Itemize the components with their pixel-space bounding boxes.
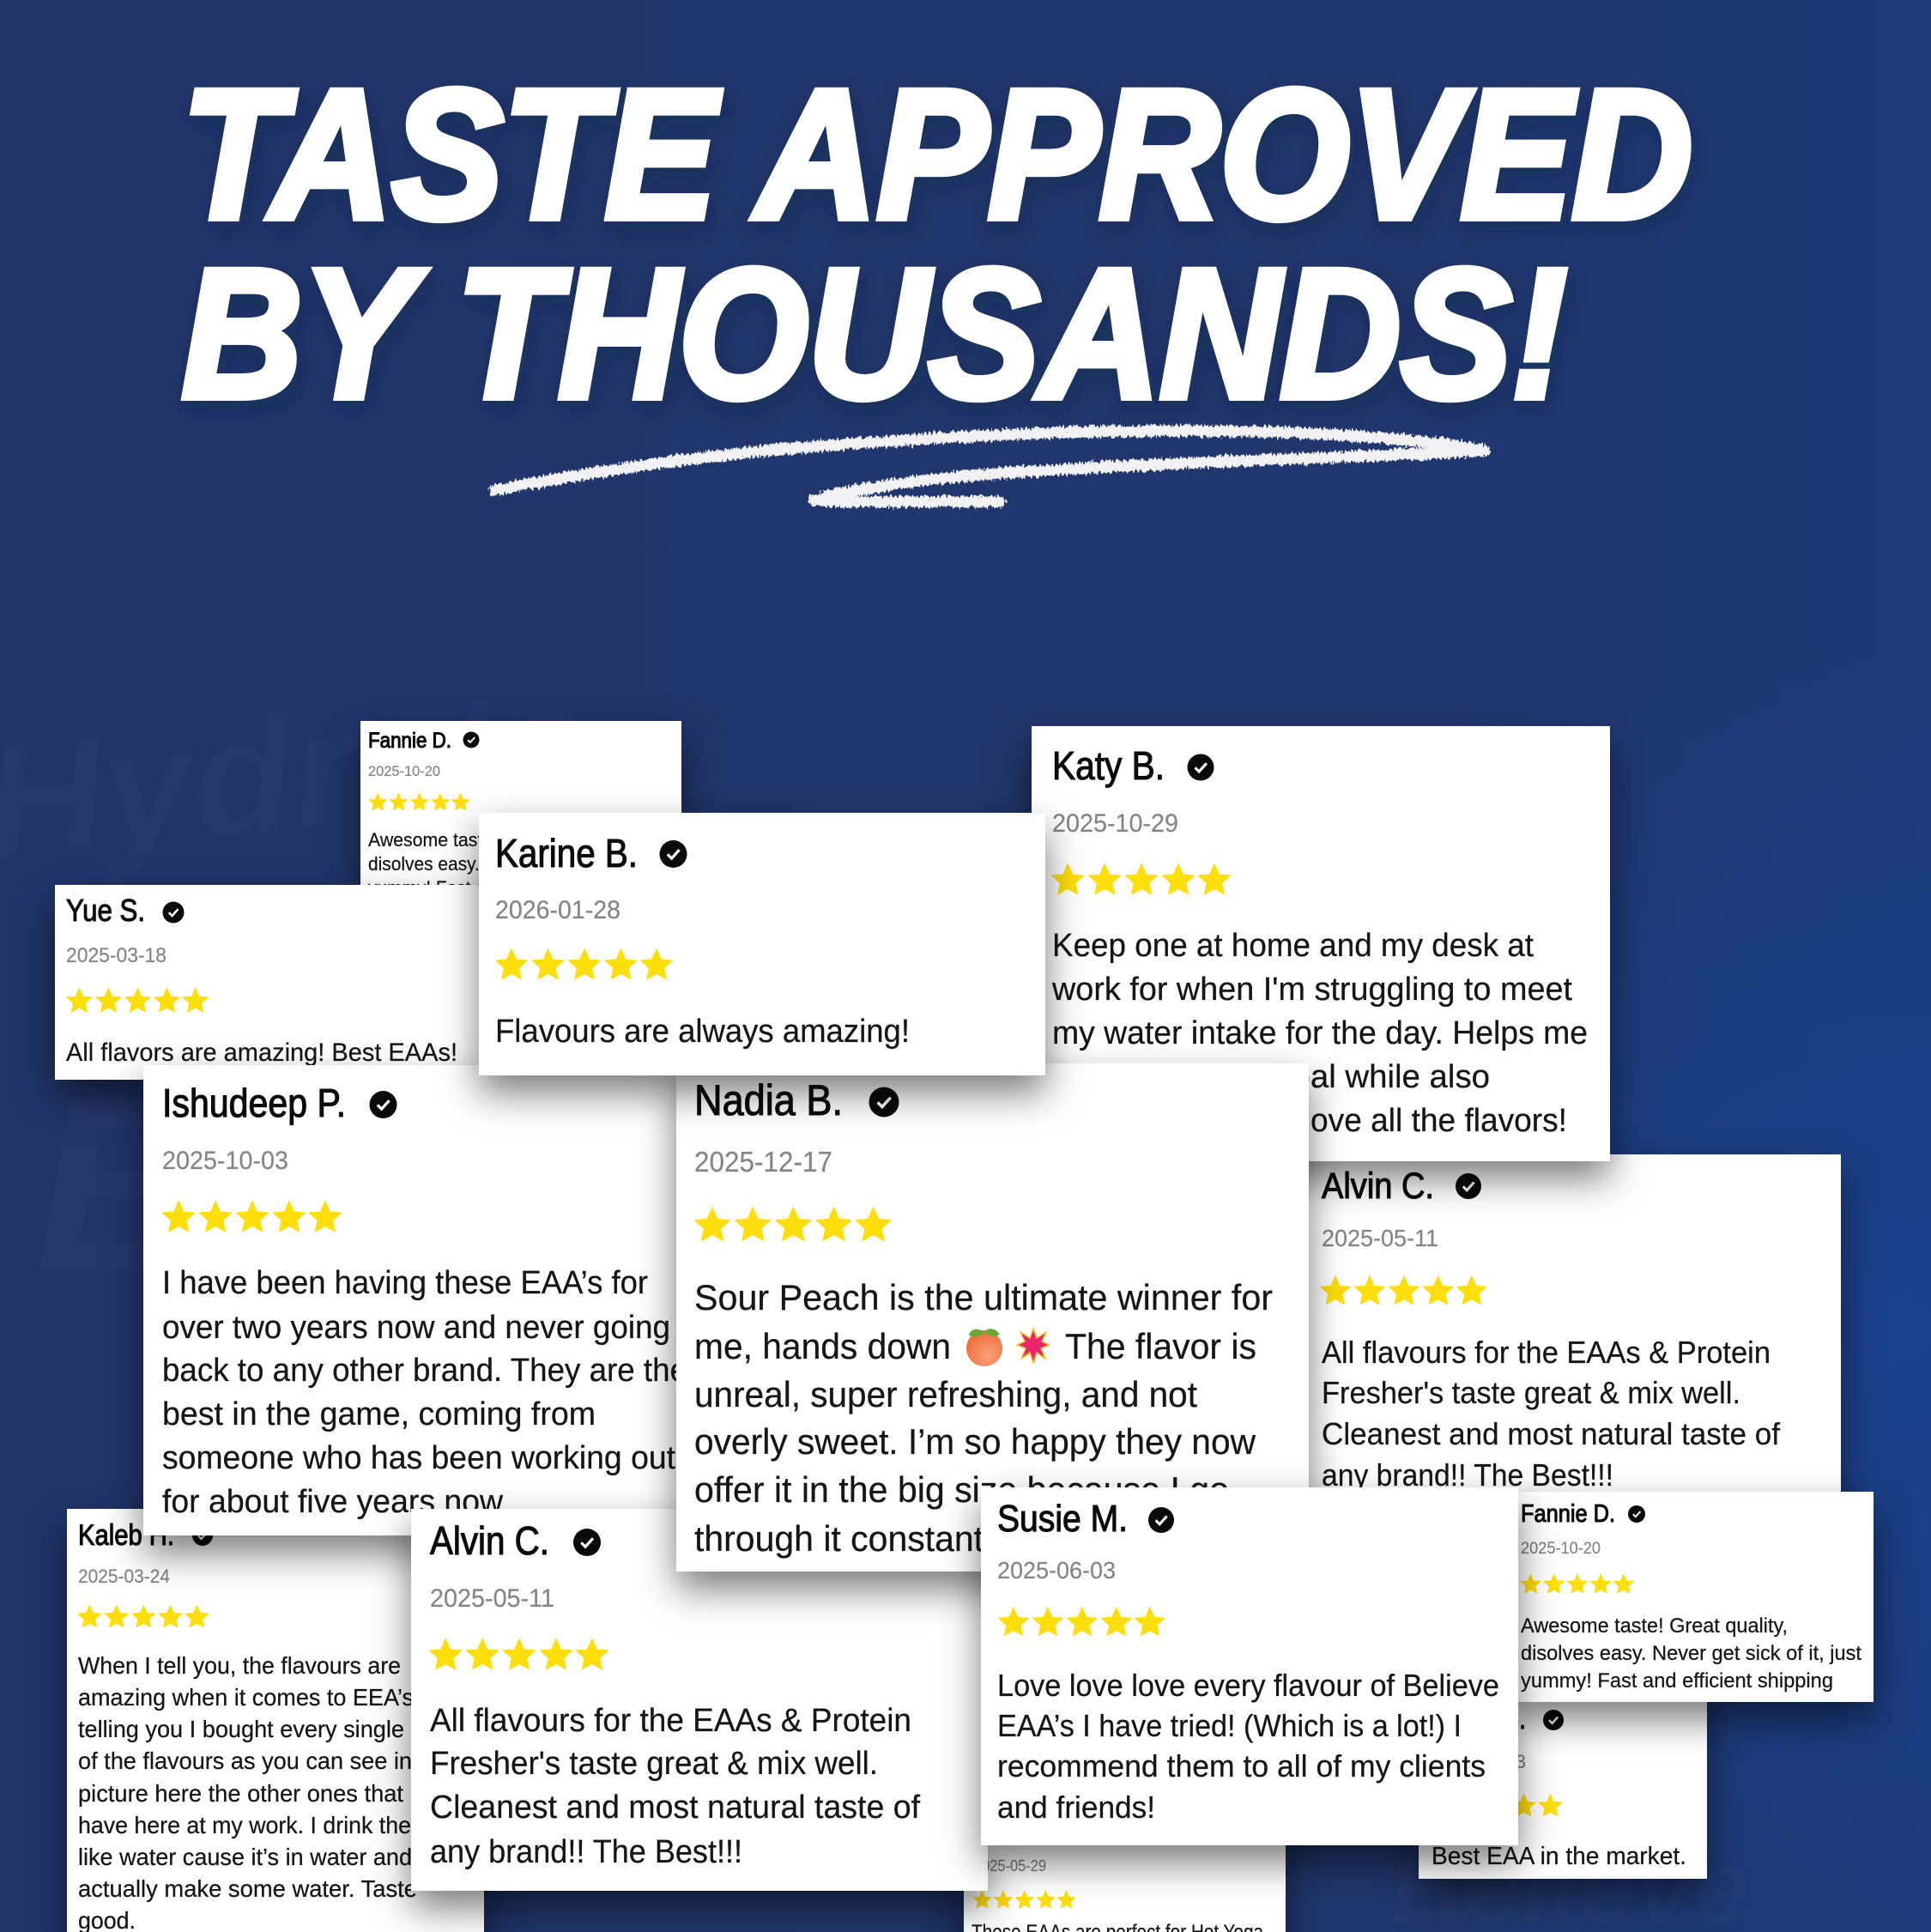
review text: picture here the other ones that bbox=[78, 1780, 403, 1807]
review text: for about five years now bbox=[162, 1484, 504, 1520]
title: TASTE APPROVED bbox=[182, 51, 1692, 257]
five stars bbox=[67, 988, 208, 1012]
five stars bbox=[695, 1208, 891, 1240]
five stars bbox=[973, 1891, 1075, 1908]
review text: Keep one at home and my desk at bbox=[1052, 928, 1534, 964]
review text: All flavours for the EAAs & Protein bbox=[1322, 1335, 1771, 1370]
review date: 2025-08-13 bbox=[1432, 1751, 1526, 1772]
review card: Nadia B. bbox=[676, 1063, 1309, 1572]
review text: Sour Peach is the ultimate winner for bbox=[694, 1277, 1273, 1317]
review date: 2025-03-18 bbox=[66, 944, 166, 967]
title: BY THOUSANDS! bbox=[182, 232, 1567, 436]
review date: 2025-10-03 bbox=[162, 1147, 288, 1175]
review text: amazing when it comes to EEA’s bbox=[78, 1684, 414, 1711]
verified badge bbox=[369, 1091, 396, 1118]
review text: Flavours are always amazing! bbox=[495, 1014, 910, 1050]
review text: overly sweet. I’m so happy they now bbox=[694, 1421, 1256, 1462]
review text: over two years now and never going bbox=[162, 1310, 670, 1346]
review text bbox=[997, 1668, 1499, 1825]
review text: yummy! Fast and efficient shipping bbox=[368, 877, 644, 899]
reviewer name: Alvin C. bbox=[1322, 1166, 1434, 1207]
review date: 2025-12-17 bbox=[694, 1146, 832, 1178]
review text: Fresher's taste great & mix well. bbox=[430, 1746, 878, 1782]
review text: and friends! bbox=[997, 1790, 1155, 1825]
review text bbox=[1521, 1614, 1861, 1693]
five stars bbox=[1432, 1794, 1562, 1816]
review card: Yue S. bbox=[55, 885, 570, 1080]
reviewer name: Susie M. bbox=[997, 1498, 1128, 1540]
review card: bottom partly hidden bbox=[964, 1691, 1286, 1932]
review text: someone who has been working out bbox=[162, 1440, 675, 1476]
review text bbox=[1322, 1335, 1781, 1493]
review date: 2025-05-11 bbox=[1322, 1225, 1438, 1251]
review date: 2025-05-29 bbox=[974, 1857, 1046, 1874]
five stars bbox=[1521, 1574, 1633, 1593]
reviewer name: Ishudeep P. bbox=[162, 1081, 346, 1125]
review text: Cleanest and most natural taste of bbox=[1322, 1416, 1781, 1451]
review card: Alvin C. (right) bbox=[1304, 1154, 1841, 1515]
reviewer name: Fannie D. bbox=[1521, 1500, 1615, 1528]
review text bbox=[1051, 928, 1588, 1139]
review card: Karine B. bbox=[479, 813, 1045, 1075]
review text: any brand!! The Best!!! bbox=[430, 1834, 742, 1870]
verified badge bbox=[659, 840, 687, 868]
verified badge bbox=[1188, 754, 1214, 781]
review text: Cleanest and most natural taste of bbox=[430, 1790, 920, 1826]
verified badge bbox=[1543, 1710, 1564, 1730]
review text: disolves easy. Never get sick of it, just bbox=[1521, 1642, 1861, 1665]
review text: All flavours for the EAAs & Protein bbox=[430, 1703, 911, 1739]
review date: 2025-10-20 bbox=[1521, 1540, 1601, 1558]
reviewer name: Katy B. bbox=[1052, 743, 1165, 788]
five stars bbox=[163, 1202, 341, 1232]
review card: Best EAA bbox=[1419, 1682, 1707, 1879]
review date: 2025-10-29 bbox=[1052, 809, 1178, 838]
five stars bbox=[1321, 1276, 1486, 1304]
review text: I have been having these EAA’s for bbox=[162, 1265, 648, 1301]
verified badge bbox=[573, 1529, 601, 1556]
review text: Awesome taste! Great quality, bbox=[368, 829, 610, 851]
review date: 2025-10-20 bbox=[368, 763, 440, 779]
review text bbox=[430, 1703, 920, 1870]
verified badge bbox=[1628, 1505, 1645, 1523]
review text: have here at my work. I drink the bbox=[78, 1812, 411, 1838]
background: E bbox=[34, 1045, 209, 1323]
review date: 2025-05-11 bbox=[430, 1584, 554, 1613]
review text: my water intake for the day. Helps me bbox=[1052, 1015, 1588, 1051]
review text: All flavors are amazing! Best EAAs! bbox=[66, 1039, 457, 1067]
reviewer name: Karine B. bbox=[495, 831, 638, 875]
icon: explosion emoji bbox=[1017, 1329, 1050, 1363]
review date: 2025-06-03 bbox=[997, 1557, 1116, 1584]
review text: best in the game, coming from bbox=[162, 1396, 596, 1432]
review text: disolves easy. Never get sick of it, just bbox=[368, 853, 670, 875]
review text: offer it in the big size because I go bbox=[694, 1469, 1229, 1510]
reviewer name: Jason S. bbox=[1432, 1703, 1526, 1735]
review date: 2025-03-24 bbox=[78, 1566, 170, 1587]
review text: Best EAA in the market. bbox=[1432, 1843, 1686, 1870]
review card: Katy B. bbox=[1032, 726, 1610, 1161]
review text: When I tell you, the flavours are bbox=[78, 1652, 401, 1679]
reviewer name: Kaleb H. bbox=[78, 1519, 174, 1552]
review text bbox=[694, 1277, 1273, 1559]
review text: Awesome taste! Great quality, bbox=[1521, 1614, 1788, 1638]
reviewer name: Alvin C. bbox=[430, 1518, 549, 1563]
five stars bbox=[430, 1639, 608, 1669]
review text: work for when I'm struggling to meet bbox=[1051, 972, 1572, 1008]
review text: unreal, super refreshing, and not bbox=[694, 1374, 1197, 1414]
five stars bbox=[1052, 864, 1230, 894]
review text: back to any other brand. They are the bbox=[162, 1353, 687, 1389]
five stars bbox=[999, 1608, 1165, 1635]
reviewer name: Nadia B. bbox=[694, 1076, 843, 1124]
verified badge bbox=[1148, 1507, 1174, 1533]
reviewer name: Yue S. bbox=[66, 893, 145, 928]
review text: through it constantly! bbox=[694, 1518, 1019, 1559]
review card: Alvin C. (left) bbox=[411, 1509, 988, 1891]
review card: Kaleb H. bbox=[67, 1509, 484, 1932]
icon: peach emoji bbox=[966, 1329, 1002, 1366]
review text: reach my daily goal while also bbox=[1052, 1059, 1490, 1095]
review text: recommend them to all of my clients bbox=[997, 1748, 1486, 1784]
review text: me, hands down bbox=[694, 1326, 951, 1366]
review text: The flavor is bbox=[1065, 1326, 1256, 1366]
five stars bbox=[78, 1605, 209, 1627]
review card: Ishudeep P. bbox=[143, 1065, 710, 1535]
verified badge bbox=[463, 731, 479, 748]
verified badge bbox=[192, 1525, 213, 1546]
review text: yummy! Fast and efficient shipping bbox=[1521, 1669, 1833, 1693]
chalk underline bbox=[494, 431, 1485, 502]
five stars bbox=[369, 793, 469, 810]
verified badge bbox=[1456, 1173, 1481, 1199]
verified badge bbox=[869, 1087, 899, 1117]
review text: like water cause it’s in water and bbox=[78, 1844, 412, 1870]
review text bbox=[368, 829, 670, 899]
review card: Fannie D. (top) bbox=[360, 721, 681, 910]
review text: EAA’s I have tried! (Which is a lot!) I bbox=[997, 1708, 1462, 1743]
review text bbox=[162, 1265, 687, 1520]
verified badge bbox=[163, 901, 184, 924]
review text: of the flavours as you can see in bbox=[78, 1747, 412, 1774]
review text: telling you I bought every single bbox=[78, 1716, 404, 1742]
review text: actually make some water. Taste bbox=[78, 1875, 417, 1902]
five stars bbox=[496, 949, 672, 978]
review text: Love love love every flavour of Believe bbox=[997, 1668, 1499, 1703]
review text: Fresher's taste great & mix well. bbox=[1322, 1375, 1740, 1410]
title bbox=[182, 51, 1692, 436]
review text: tasting so good. I love all the flavors! bbox=[1052, 1103, 1567, 1139]
review card: Susie M. bbox=[981, 1487, 1518, 1845]
review text bbox=[78, 1652, 417, 1932]
review card: Fannie D. (right) bbox=[1509, 1492, 1873, 1702]
review text: any brand!! The Best!!! bbox=[1322, 1457, 1613, 1493]
review date: 2026-01-28 bbox=[495, 896, 620, 924]
reviewer name: Fannie D. bbox=[368, 729, 451, 753]
